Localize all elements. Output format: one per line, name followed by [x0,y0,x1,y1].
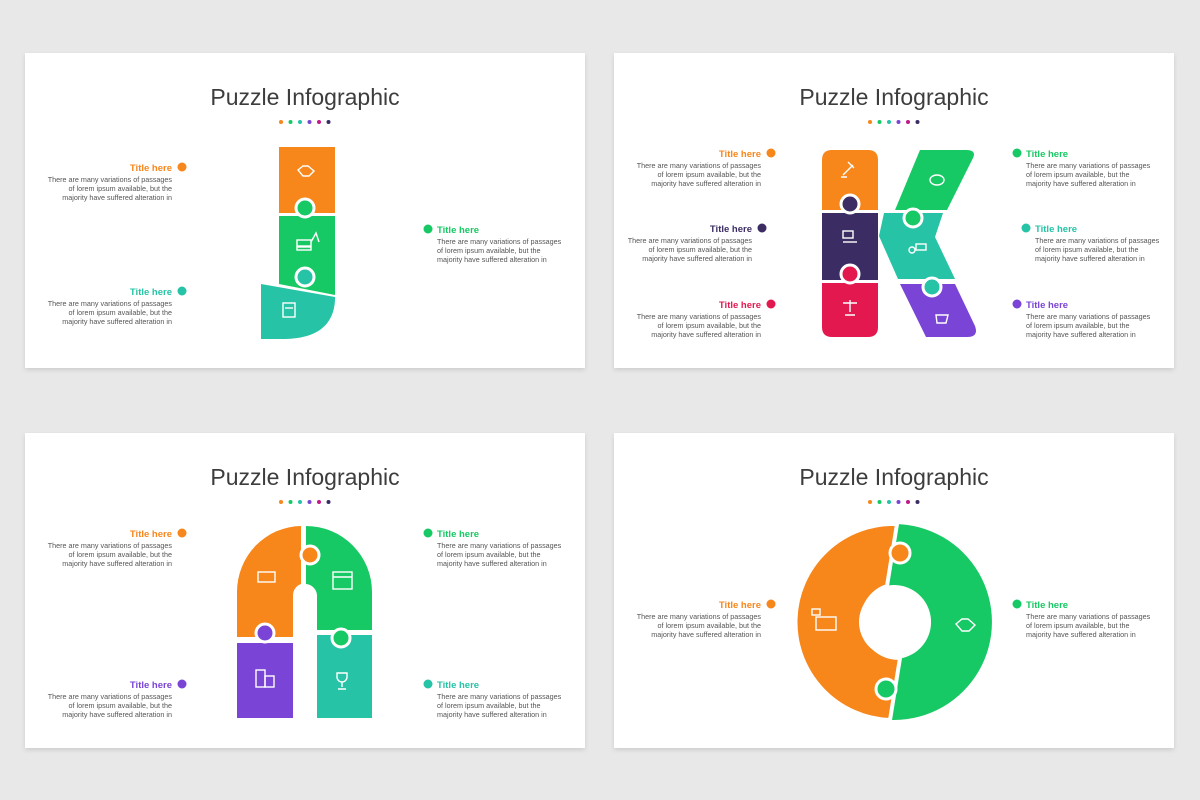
text block: left 1: majority have suffered alteration in [651,179,761,188]
text block: right: There are many variations of passages [437,237,562,246]
J shape [261,147,335,339]
text block: left bottom: majority have suffered alteration in [62,317,172,326]
text block: left bottom: majority have suffered alteration in [62,710,172,719]
title: Puzzle Infographic [210,84,400,110]
icon: meeting [843,231,857,242]
text block: left top: of lorem ipsum available, but the [69,550,172,559]
title: Puzzle Infographic [210,464,400,490]
icon: bank [333,572,352,589]
text block: left top: Title here [130,163,172,174]
text block: left top [48,162,186,202]
text block: left bottom: There are many variations of passages [48,692,172,701]
text block: left top: majority have suffered alteration in [62,559,172,568]
icon: scales [843,300,857,315]
text block: left 1: of lorem ipsum available, but the [658,170,761,179]
text block: right 2: Title here [1035,224,1077,235]
text block: left 3: of lorem ipsum available, but the [658,321,761,330]
text block: left top [48,528,186,568]
text block: right: Title here [1026,600,1068,611]
text block: left 1: Title here [719,149,761,160]
text block: left: There are many variations of passages [637,612,761,621]
icon: secure card [812,609,836,630]
text block: left 3: There are many variations of passages [637,312,761,321]
text block: right 2: majority have suffered alteration in [1035,254,1145,263]
icon: speaker [909,244,926,253]
text block: right 1: There are many variations of passages [1026,161,1151,170]
icon: handshake [298,166,314,176]
panel: arch puzzle [25,433,585,748]
text block: right: Title here [437,225,479,236]
icon: trophy [337,673,347,689]
text block: left 3: majority have suffered alteration in [651,330,761,339]
text block: right 2: of lorem ipsum available, but the [1035,245,1138,254]
icon: excavator [297,233,319,250]
panel: K puzzle [614,53,1174,368]
text block: right top [424,528,562,568]
title: Puzzle Infographic [799,84,989,110]
color dots [868,500,920,504]
text block: left bottom [48,680,186,719]
text block: left bottom: Title here [130,680,172,691]
text block: right 3: Title here [1026,300,1068,311]
text block: right: of lorem ipsum available, but the [1026,621,1129,630]
text block: left bottom: of lorem ipsum available, but the [69,701,172,710]
text block: left 2 [628,224,766,263]
text block: right 3: majority have suffered alteration in [1026,330,1136,339]
text block: left: Title here [719,600,761,611]
text block: left 2: There are many variations of passages [628,236,752,245]
text block: right top: majority have suffered alteration in [437,559,547,568]
text block: right 3 [1012,300,1151,339]
text block: right 2 [1022,224,1160,263]
panel: circle puzzle [614,433,1174,748]
icon: calculator [283,303,295,317]
text block: left top: majority have suffered alteration in [62,193,172,202]
icon: gavel [841,162,854,177]
icon: atm [258,572,275,582]
icon: piggy bank [930,175,944,185]
donut shape [795,524,992,720]
text block: left: majority have suffered alteration in [651,630,761,639]
text block: right top: There are many variations of passages [437,541,562,550]
text block: left top: There are many variations of passages [48,541,172,550]
text block: left 3 [637,300,776,339]
text block: left: of lorem ipsum available, but the [658,621,761,630]
text block: right top: of lorem ipsum available, but the [437,550,540,559]
color dots [868,120,920,124]
arch shape [237,526,372,718]
text block: right bottom: Title here [437,680,479,691]
panel: J puzzle [25,53,585,368]
text block: left 2: Title here [710,224,752,235]
icon: buildings [256,670,274,687]
icon: cart [936,315,948,323]
text block: right: majority have suffered alteration in [1026,630,1136,639]
color dots [279,500,330,504]
text block: left bottom: There are many variations of passages [48,299,172,308]
title: Puzzle Infographic [799,464,989,490]
text block: right: of lorem ipsum available, but the [437,246,540,255]
text block: right bottom [424,680,562,719]
text block: left top: of lorem ipsum available, but the [69,184,172,193]
text block: right 2: There are many variations of passages [1035,236,1160,245]
text block: right [424,224,562,264]
text block: right bottom: of lorem ipsum available, but the [437,701,540,710]
text block: right top: Title here [437,529,479,540]
text block: right bottom: majority have suffered alteration in [437,710,547,719]
text block: left top: Title here [130,529,172,540]
icon: handshake [956,619,975,631]
text block: right [1012,600,1151,639]
text block: left 2: majority have suffered alteration in [642,254,752,263]
text block: right: majority have suffered alteration in [437,255,547,264]
text block: left bottom: Title here [130,287,172,298]
text block: left 1 [637,148,776,188]
text block: right 1: of lorem ipsum available, but the [1026,170,1129,179]
text block: left 3: Title here [719,300,761,311]
text block: left bottom: of lorem ipsum available, but the [69,308,172,317]
K shape [822,150,976,337]
color dots [279,120,330,124]
text block: left 2: of lorem ipsum available, but the [649,245,752,254]
text block: right: There are many variations of passages [1026,612,1151,621]
text block: left 1: There are many variations of passages [637,161,761,170]
text block: right 3: There are many variations of passages [1026,312,1151,321]
text block: right 1 [1012,148,1151,188]
text block: left top: There are many variations of passages [48,175,172,184]
text block: right bottom: There are many variations of passages [437,692,562,701]
text block: right 1: majority have suffered alteration in [1026,179,1136,188]
text block: right 1: Title here [1026,149,1068,160]
text block: left bottom [48,286,186,326]
text block: left [637,600,776,639]
text block: right 3: of lorem ipsum available, but the [1026,321,1129,330]
